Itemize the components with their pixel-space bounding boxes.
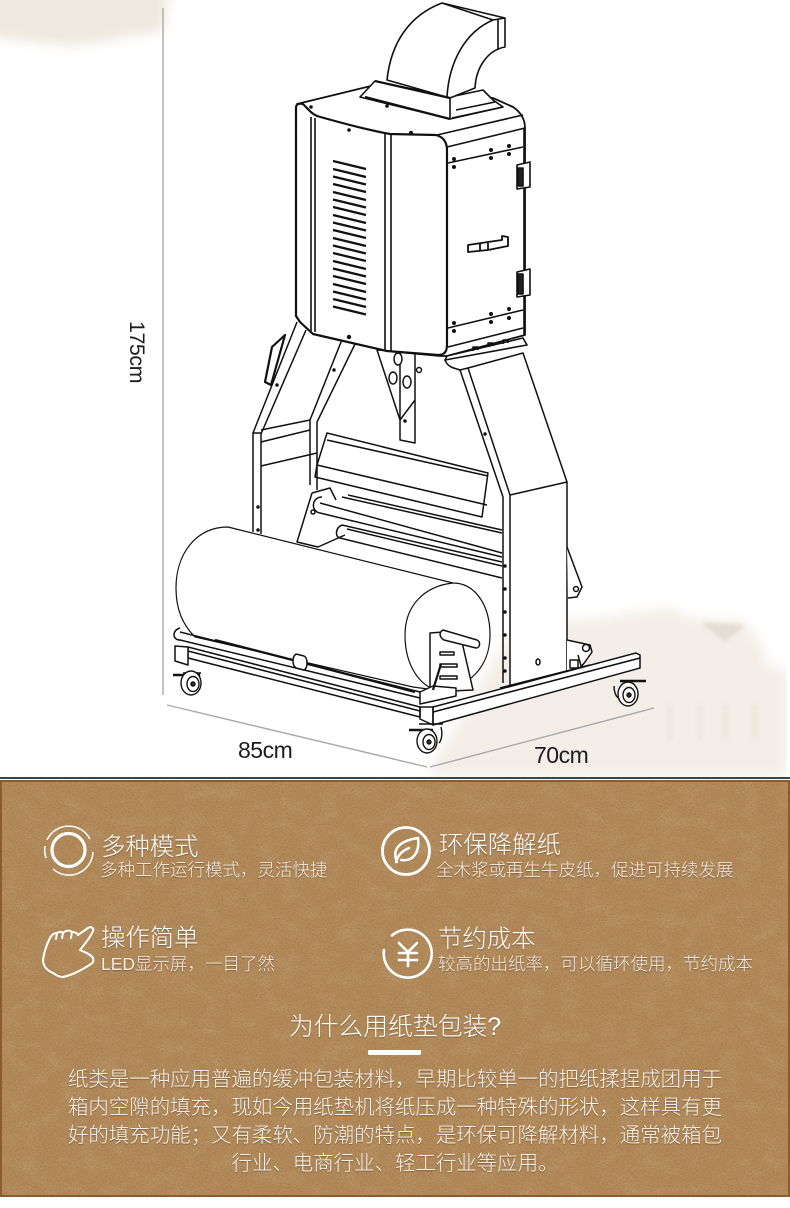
vent slots [333, 161, 366, 314]
feature: operation title: 操作简单 [101, 925, 199, 952]
body paragraph: 纸类是一种应用普遍的缓冲包装材料，早期比较单一的把纸揉捏成团用于 [68, 1068, 722, 1091]
centre bracket [377, 350, 422, 443]
machine frame [253, 322, 592, 687]
door handle [468, 236, 508, 252]
side door [437, 115, 525, 347]
divider under heading [368, 1050, 421, 1055]
icon: yen [384, 930, 432, 978]
hinges [517, 162, 530, 297]
background blotch: top left [0, 0, 170, 46]
feature: modes title: 多种模式 [101, 834, 199, 861]
cabinet shell [296, 85, 525, 356]
kraft paper panel [0, 777, 790, 1197]
height label: 175cm [125, 321, 149, 383]
right leg [445, 353, 592, 687]
body paragraph: 箱内空隙的填充，现如今用纸垫机将纸压成一种特殊的形状，这样具有更 [68, 1096, 722, 1119]
cabinet [296, 3, 530, 360]
body paragraph: 行业、电商行业、轻工行业等应用。 [232, 1152, 558, 1175]
icon: modes ring [45, 826, 93, 875]
left caster [173, 671, 201, 695]
dimension line: height [162, 8, 164, 695]
roll holder bracket [420, 630, 480, 704]
feature: paper text: 全木浆或再生牛皮纸，促进可持续发展 [436, 860, 734, 880]
body paragraph: 好的填充功能；又有柔软、防潮的特点，是环保可降解材料，通常被箱包 [68, 1124, 722, 1147]
lower plate [445, 338, 527, 360]
dimension line: depth [167, 705, 427, 767]
panel seams [311, 117, 391, 352]
feature: cost text: 较高的出纸率，可以循环使用，节约成本 [438, 954, 753, 974]
width label: 70cm [534, 742, 588, 768]
dimension line: width [430, 708, 654, 767]
icon: hand [43, 927, 93, 977]
feature: paper title: 环保降解纸 [439, 832, 561, 859]
icon: leaf [382, 828, 430, 874]
left leg [253, 322, 357, 534]
feature: cost title: 节约成本 [438, 926, 536, 953]
exhaust duct [360, 3, 505, 119]
feature: modes text: 多种工作运行模式，灵活快捷 [100, 860, 328, 880]
background blotch: bottom right [430, 600, 790, 780]
feed belt and rollers [297, 433, 502, 578]
depth label: 85cm [238, 737, 292, 763]
body paragraph [68, 1068, 722, 1175]
paper roll [176, 527, 490, 690]
section heading: 为什么用纸垫包装? [289, 1014, 501, 1041]
base and axle [174, 628, 640, 725]
right caster [614, 681, 646, 706]
front caster [409, 724, 443, 753]
feature: operation text: LED显示屏，一目了然 [101, 954, 275, 974]
caster wheels [173, 671, 646, 753]
